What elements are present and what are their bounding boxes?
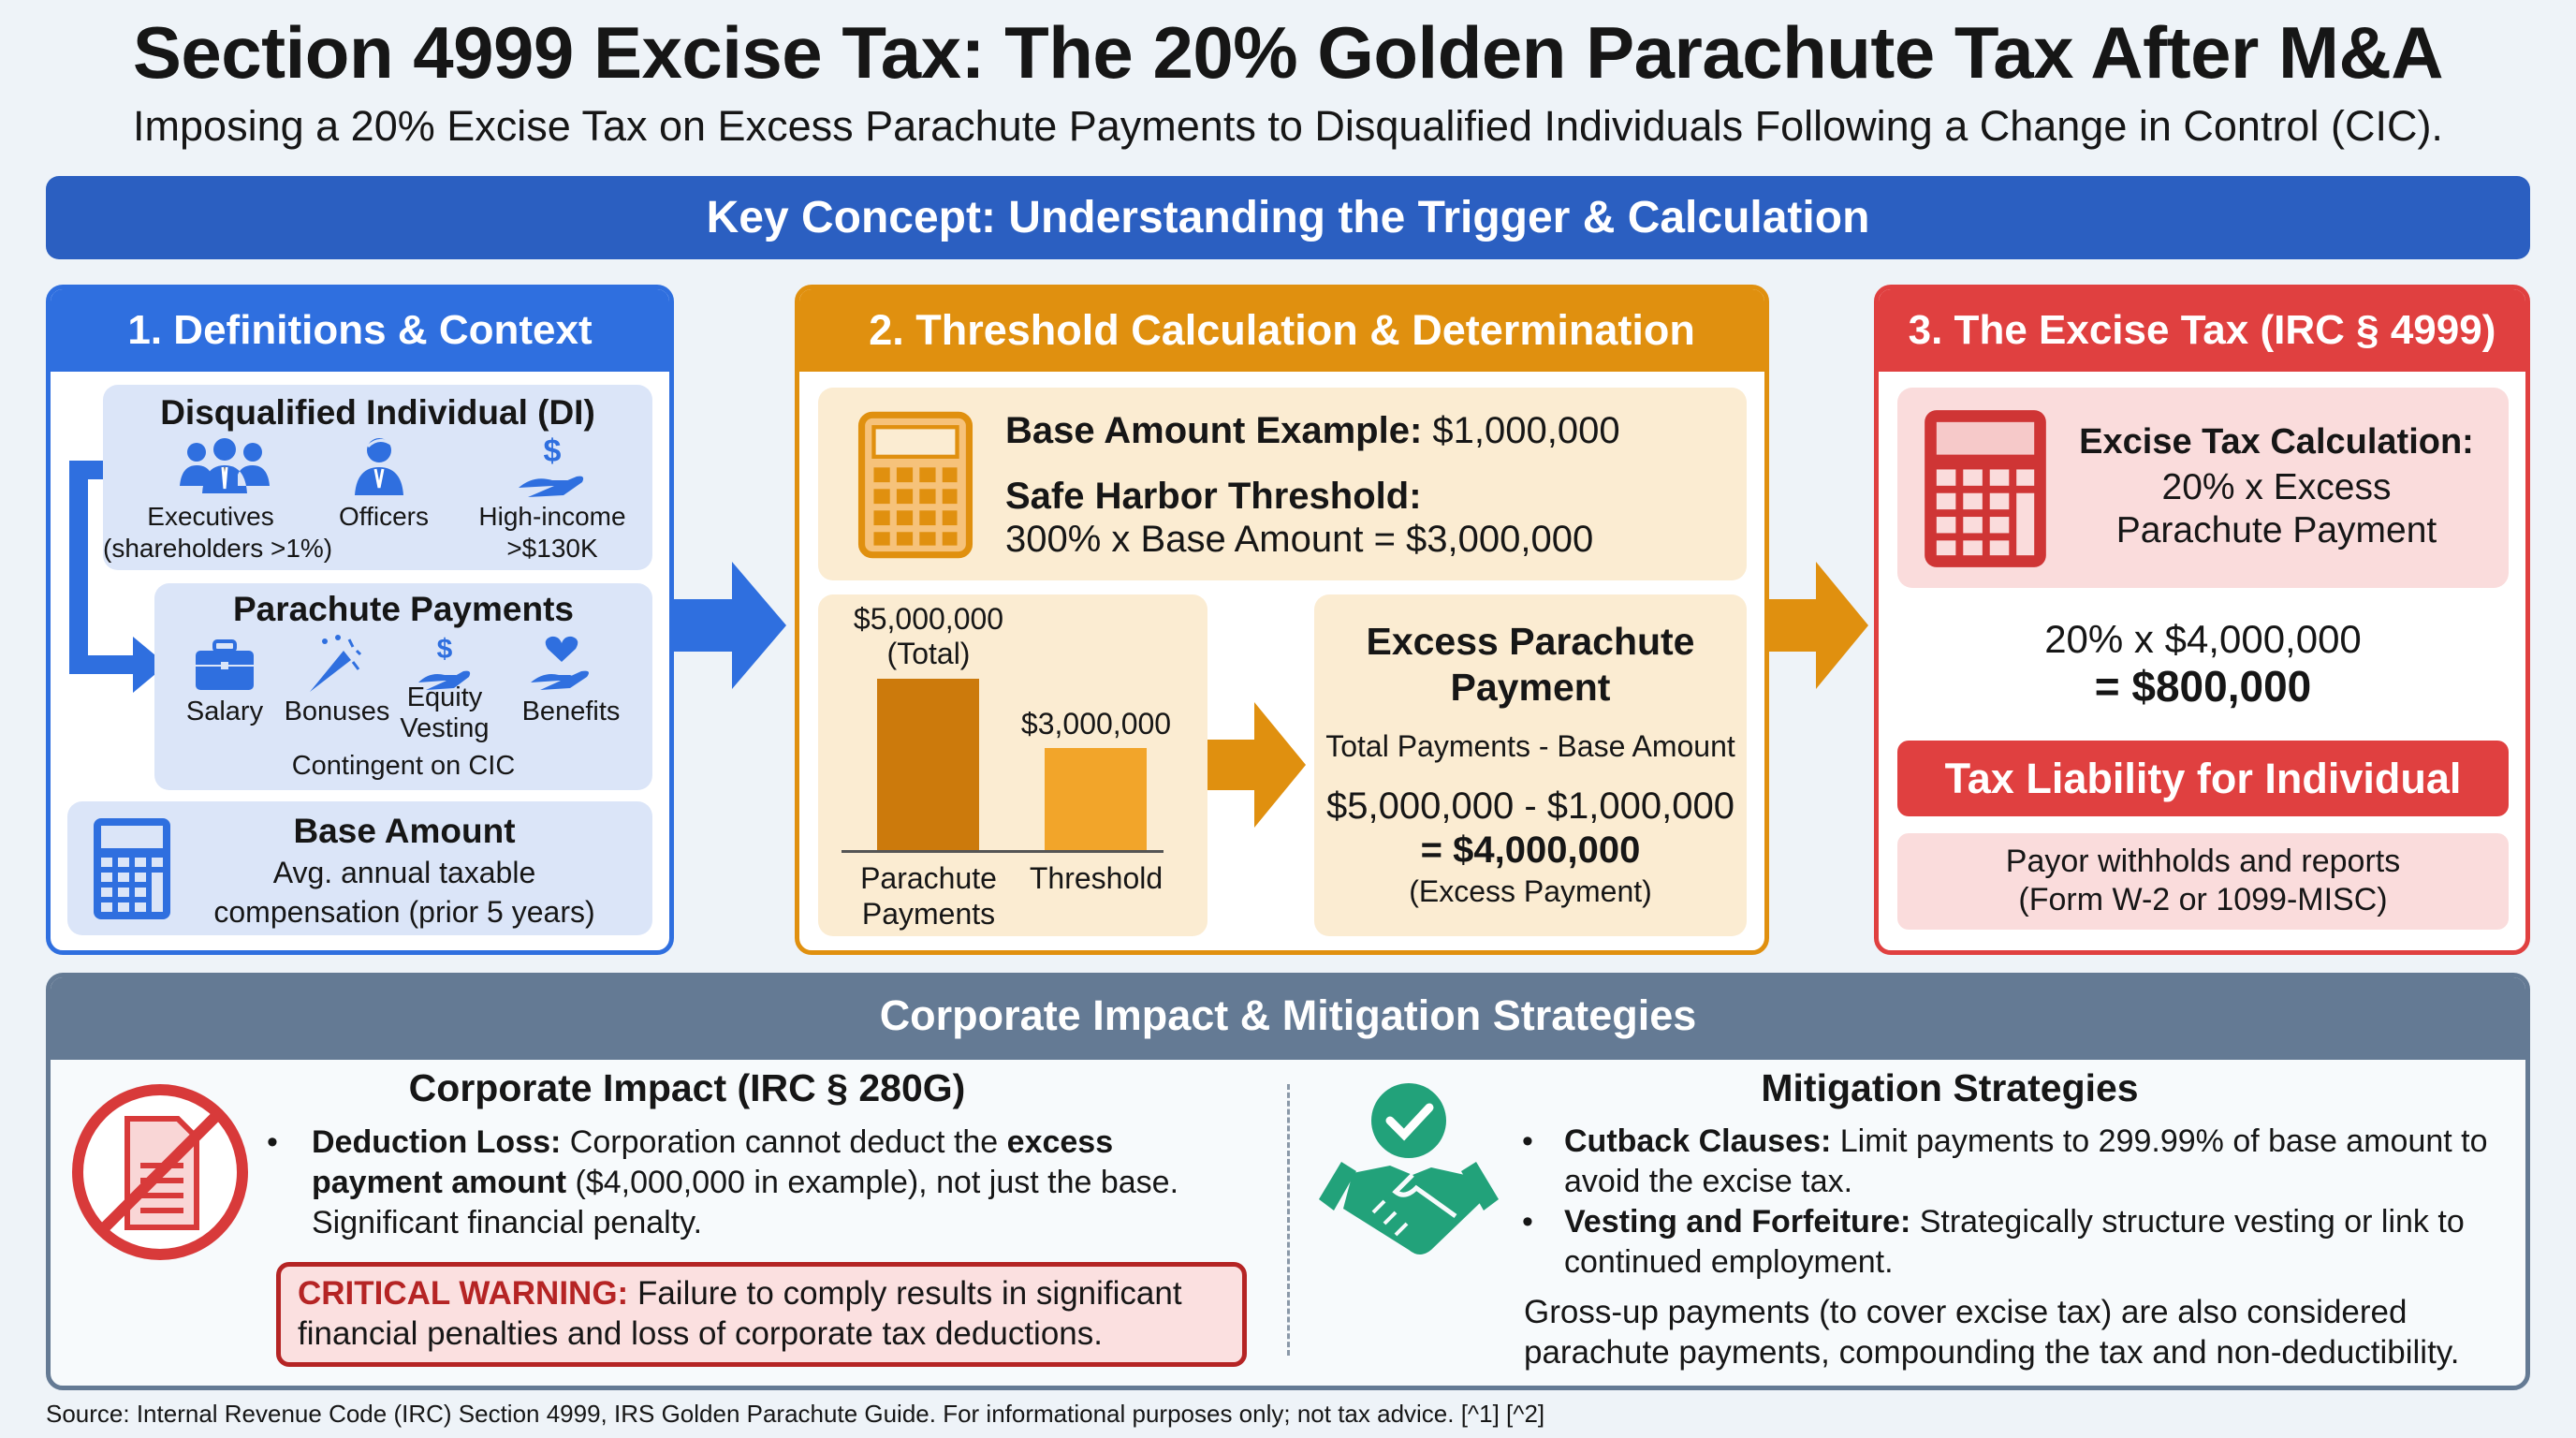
bar: total — [877, 679, 979, 851]
box: parachute payments: Equity — [407, 682, 482, 712]
text: Base Amount Example: $1,000,000 — [1005, 410, 1620, 451]
labels: (shareholders >1%) — [103, 534, 332, 563]
text: gross-up note: Gross-up payments (to cover excise tax) are also considered parachute payments, compounding the tax and non-deductibility. — [1524, 1294, 2459, 1371]
icon: equity: $ — [437, 634, 453, 665]
text: mitigation bullets — [1522, 1123, 2488, 1280]
icon: handshake check — [1319, 1083, 1499, 1255]
panel: excise tax — [1874, 285, 2530, 955]
labels — [103, 502, 332, 563]
icon: calculator red — [1925, 410, 2046, 567]
panel header — [799, 289, 1764, 372]
icon: calculator orange — [857, 412, 973, 558]
heading: Disqualified Individual (DI) — [160, 393, 595, 432]
box: excess parachute payment: Payment — [1451, 666, 1610, 709]
text: mitigation bullets: Cutback Clauses: Limit payments to 299.99% of base amount to avoid the excise tax. — [1564, 1123, 2488, 1199]
subtitle: Imposing a 20% Excise Tax on Excess Parachute Payments to Disqualified Individuals Following a Change in Control (CIC). — [133, 102, 2443, 150]
arrow: orange inner — [1208, 702, 1306, 828]
icon: high income — [519, 433, 584, 497]
banner: key concept: Key Concept: Understanding the Trigger & Calculation — [707, 193, 1869, 242]
box: base amount example: 300% x Base Amount = $3,000,000 — [1005, 519, 1593, 560]
heading: mitigation strategies: Mitigation Strategies — [1761, 1066, 2139, 1109]
chart: bar chart — [818, 594, 1208, 936]
panel: definitions & context — [46, 285, 674, 955]
box: excise tax calculation: Excise Tax Calculation: — [2079, 422, 2474, 462]
icon: equity — [418, 634, 470, 690]
icon: executives — [180, 438, 270, 493]
box: parachute payments: Bonuses — [285, 697, 389, 726]
banner: key concept — [46, 176, 2530, 259]
box: base amount example — [818, 388, 1747, 580]
box: excess parachute payment: $5,000,000 - $1,000,000 — [1326, 785, 1734, 827]
panel header: 3. The Excise Tax (IRC § 4999) — [1909, 307, 2496, 353]
text: Base Amount — [293, 812, 516, 850]
box: parachute payments — [154, 583, 652, 790]
box: excess parachute payment: = $4,000,000 — [1421, 829, 1640, 871]
box: base amount: compensation (prior 5 years) — [213, 895, 595, 929]
panel header — [51, 289, 669, 372]
box: excise tax calculation: Parachute Payment — [2116, 510, 2437, 550]
icon: officer — [355, 438, 403, 495]
text: deduction loss: • — [267, 1124, 278, 1160]
text: = $800,000 — [2095, 662, 2311, 711]
chart: bar chart: Payments — [862, 897, 995, 931]
box: base amount: Avg. annual taxable — [273, 856, 535, 889]
bar: threshold — [1045, 748, 1147, 851]
box: excise tax calculation: 20% x Excess — [2162, 467, 2391, 507]
icon: calculator — [94, 818, 170, 919]
chart: bar chart: Threshold — [1030, 861, 1163, 895]
box: parachute payments: Vesting — [400, 713, 490, 743]
panel header: 1. Definitions & Context — [127, 307, 593, 353]
connector arrow: DI to parachute — [69, 461, 154, 693]
banner: tax liability — [1897, 741, 2509, 816]
box: parachute payments: Contingent on CIC — [292, 751, 515, 781]
panel header: Corporate Impact & Mitigation Strategies — [880, 991, 1696, 1039]
box: excise tax calculation — [1897, 388, 2509, 588]
panel header — [51, 977, 2525, 1060]
heading: corporate impact: Corporate Impact (IRC § 280G) — [409, 1066, 965, 1109]
box: disqualified individual — [103, 385, 652, 570]
callout: critical warning — [276, 1262, 1247, 1367]
panel header — [1879, 289, 2525, 372]
divider — [1287, 1084, 1290, 1356]
arrow: orange — [1769, 562, 1868, 689]
panel header: 2. Threshold Calculation & Determination — [869, 306, 1695, 354]
box: disqualified individual: Officers — [339, 502, 429, 531]
text: mitigation bullets: • — [1522, 1123, 1533, 1159]
box: excess parachute payment — [1314, 594, 1747, 936]
labels: Salary — [186, 697, 263, 726]
box: excess parachute payment: (Excess Payment) — [1409, 874, 1652, 908]
box: withholding — [1897, 833, 2509, 930]
box: base amount — [67, 801, 652, 935]
arrow: blue — [674, 562, 786, 689]
labels: Executives — [147, 502, 274, 531]
box: disqualified individual: High-income — [478, 502, 626, 531]
panel: threshold calculation — [795, 285, 1769, 955]
panel: corporate impact & mitigation — [46, 973, 2530, 1390]
icon: benefits — [531, 637, 589, 690]
banner: tax liability: Tax Liability for Individual — [1945, 755, 2461, 802]
box: withholding: Payor withholds and reports — [2006, 844, 2400, 879]
box: withholding: (Form W-2 or 1099-MISC) — [2018, 882, 2388, 917]
box: disqualified individual: >$130K — [506, 534, 598, 563]
icon: salary — [196, 639, 254, 690]
callout: critical warning: CRITICAL WARNING: Failure to comply results in significant financial penalties and loss of corporate tax deductions. — [298, 1275, 1182, 1352]
box: excess parachute payment: Excess Parachute — [1366, 620, 1694, 663]
chart: bar chart: (Total) — [887, 637, 970, 670]
chart: bar chart: $5,000,000 — [854, 602, 1003, 636]
icon: no document — [72, 1084, 248, 1260]
icon: bonuses — [310, 635, 361, 692]
chart: bar chart: Parachute — [860, 861, 997, 895]
text: mitigation bullets: • — [1522, 1204, 1533, 1240]
chart: bar chart: $3,000,000 — [1021, 707, 1171, 741]
box: base amount example: Safe Harbor Threshold: — [1005, 476, 1422, 517]
box: parachute payments: Benefits — [522, 697, 620, 726]
footer: source: Source: Internal Revenue Code (IRC) Section 4999, IRS Golden Parachute Guide. For informational purposes only; not tax advice. [^1] [^2] — [46, 1400, 1544, 1428]
text: tax computation: 20% x $4,000,000 — [2044, 617, 2362, 661]
box: excess parachute payment: Total Payments - Base Amount — [1325, 729, 1735, 763]
text: mitigation bullets: Vesting and Forfeiture: Strategically structure vesting or link to continued employment. — [1564, 1204, 2465, 1280]
title: Section 4999 Excise Tax: The 20% Golden Parachute Tax After M&A — [133, 11, 2443, 94]
icon: high income: $ — [544, 433, 562, 469]
text: deduction loss: Deduction Loss: Corporation cannot deduct the excess payment amount ($4,000,000 in example), not just the base. Significant financial penalty. — [312, 1124, 1178, 1240]
heading: Parachute Payments — [233, 590, 574, 628]
